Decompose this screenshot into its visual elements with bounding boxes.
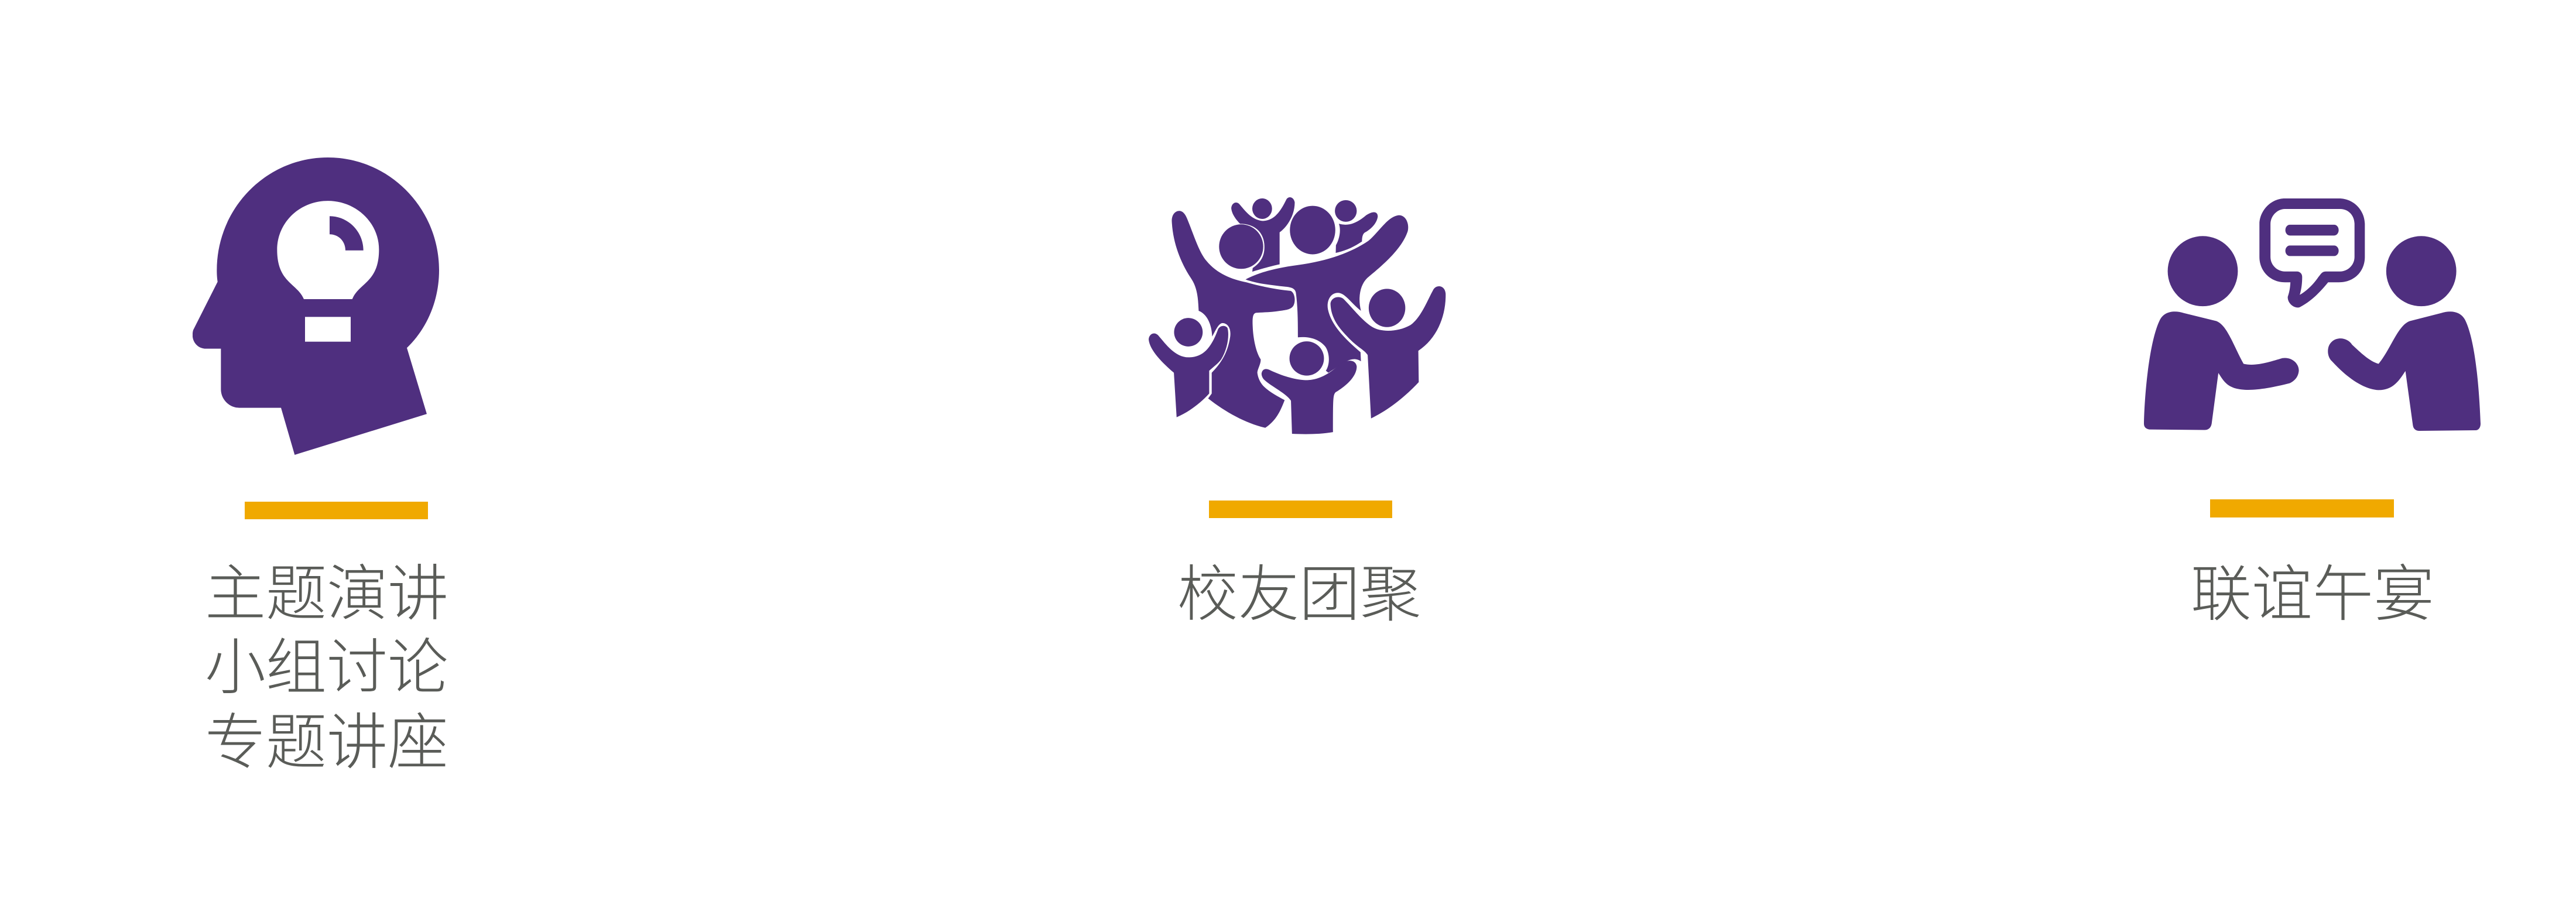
accent bar <box>2210 499 2394 517</box>
text: alumni reunion: 校友团聚 <box>1177 561 1421 629</box>
text: session types: 小组讨论 <box>205 634 448 702</box>
icon: head with lightbulb <box>193 157 439 455</box>
text: session types <box>205 560 448 777</box>
panel: alumni reunion <box>1149 197 1446 629</box>
panel: keynote and talks <box>193 157 448 777</box>
text: networking luncheon: 联谊午宴 <box>2191 561 2434 629</box>
accent bar <box>245 502 428 519</box>
icon: group of people with raised arms <box>1149 197 1446 434</box>
icon: two people talking with speech bubble <box>2144 198 2481 431</box>
text: session types: 主题演讲 <box>205 560 448 628</box>
text: session types: 专题讲座 <box>205 709 448 777</box>
accent bar <box>1209 501 1392 518</box>
panel: networking luncheon <box>2144 198 2481 629</box>
